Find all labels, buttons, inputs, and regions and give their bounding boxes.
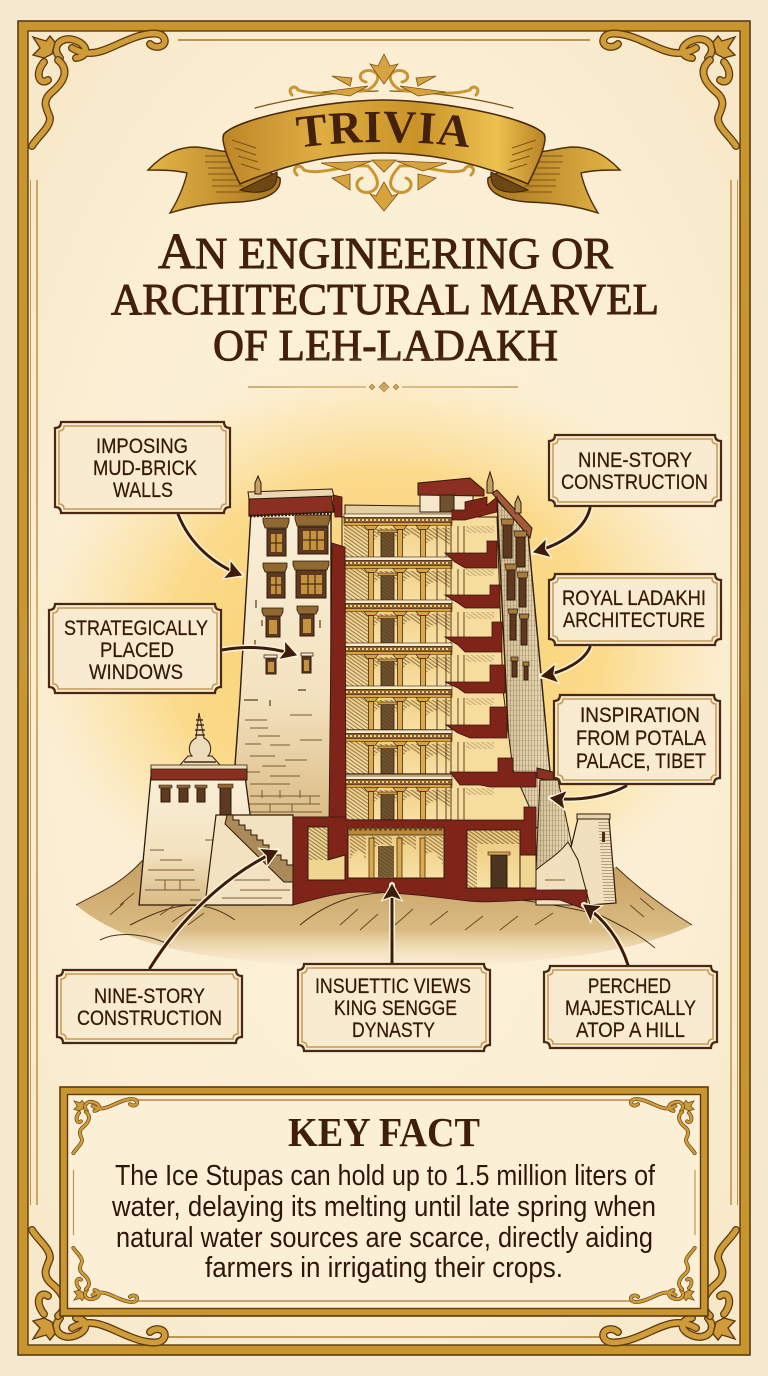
label: insuettic views king sengge dynasty: KING SENGGE: [334, 997, 457, 1020]
red cutaway structure: [293, 495, 587, 910]
label: imposing mud-brick walls: [55, 422, 230, 513]
label: royal ladakhi architecture: [549, 574, 721, 645]
key fact body text: water, delaying its melting until late spring when: [111, 1191, 656, 1223]
label: royal ladakhi architecture: ROYAL LADAKHI: [562, 587, 706, 610]
key fact heading: KEY FACT: [288, 1109, 480, 1155]
arrow: bottom nine-story: [150, 851, 277, 968]
label: inspiration from potala palace: INSPIRATION: [580, 704, 700, 727]
banner title: TRIVIA: [296, 112, 469, 148]
label: insuettic views king sengge dynasty: INSUETTIC VIEWS: [315, 975, 471, 998]
label: inspiration from potala palace: FROM POTALA: [576, 727, 706, 750]
small stupa building: [139, 713, 262, 905]
key fact body text: natural water sources are scarce, directly aiding: [116, 1222, 653, 1254]
floor 5: [344, 686, 494, 730]
right tower windows: [501, 519, 529, 680]
stairway wall: [205, 815, 293, 905]
title line 1: AN ENGINEERING OR: [158, 224, 614, 280]
golden glow behind palace: [19, 350, 749, 950]
arrow: perched on hill: [584, 905, 628, 965]
label: perched atop a hill: [544, 966, 717, 1048]
upper penthouse: [345, 478, 484, 518]
ribbon main band: [223, 100, 545, 184]
label: royal ladakhi architecture: ARCHITECTURE: [563, 609, 705, 632]
floor 3: [344, 776, 494, 820]
label: nine-story construction top: [549, 435, 721, 506]
key fact corner flourish: top left: [73, 1099, 137, 1153]
floor 9: [344, 514, 494, 558]
arrow: potala inspiration: [551, 786, 626, 799]
title line 3: OF LEH-LADAKH: [213, 321, 558, 370]
label: insuettic views king sengge dynasty: [298, 964, 490, 1051]
palace illustration: [76, 472, 692, 968]
key fact corner flourish: top right: [631, 1099, 695, 1153]
floor 8: [344, 557, 494, 601]
label: imposing mud-brick walls: IMPOSING: [96, 435, 188, 458]
key fact body text: [111, 1160, 656, 1284]
ornament above banner: [255, 54, 513, 108]
label: nine-story construction bottom: [57, 970, 242, 1043]
label: inspiration from potala palace: PALACE, TIBET: [576, 750, 706, 773]
title: [111, 224, 659, 370]
label: insuettic views king sengge dynasty: DYNASTY: [352, 1019, 435, 1042]
title line 2: ARCHITECTURAL MARVEL: [111, 275, 659, 324]
label: imposing mud-brick walls: WALLS: [113, 479, 173, 502]
floor 6: [344, 643, 494, 687]
arrow: imposing walls: [178, 514, 241, 575]
tower windows: [262, 515, 330, 674]
left tower roof: [249, 494, 334, 516]
arrow: top nine-story: [534, 508, 590, 552]
corner flourish: bottom right: [603, 1230, 736, 1342]
arrow: windows: [222, 648, 296, 655]
right tower: [487, 472, 575, 870]
corner flourish: top left: [32, 34, 165, 146]
floor 4: [344, 730, 494, 774]
title divider: [248, 382, 518, 392]
ribbon tail right: [488, 147, 620, 213]
label: strategically placed windows: STRATEGICALLY: [64, 617, 208, 640]
label: strategically placed windows: PLACED: [100, 639, 174, 662]
ribbon tail left: [148, 147, 280, 213]
panel: key fact: [60, 1087, 708, 1316]
cutaway interior: [342, 514, 536, 822]
left tower: [216, 476, 334, 822]
basement rooms: [308, 827, 536, 888]
label: perched atop a hill: PERCHED: [588, 975, 671, 998]
ornament below banner: [295, 160, 473, 211]
arrow: royal architecture: [542, 647, 590, 676]
label: perched atop a hill: MAJESTICALLY: [565, 997, 696, 1020]
label: imposing mud-brick walls: MUD-BRICK: [93, 457, 197, 480]
stupa: [180, 713, 220, 770]
label: nine-story construction top: CONSTRUCTION: [561, 471, 708, 494]
left tower finial: [255, 476, 261, 494]
key fact corner flourish: bottom left: [73, 1248, 137, 1302]
hill: [76, 860, 692, 968]
key fact corner flourish: bottom right: [631, 1248, 695, 1302]
label: perched atop a hill: ATOP A HILL: [576, 1019, 685, 1042]
label: strategically placed windows: [49, 604, 221, 693]
floor 7: [344, 600, 494, 644]
key fact body text: The Ice Stupas can hold up to 1.5 million liters of: [115, 1160, 656, 1192]
label: nine-story construction bottom: CONSTRUCTION: [77, 1007, 222, 1030]
arrow: insuettic views: [389, 885, 395, 964]
label: strategically placed windows: WINDOWS: [89, 661, 183, 684]
corner flourish: top right: [603, 34, 736, 146]
right small tower: [536, 814, 616, 905]
corner flourish: bottom left: [32, 1230, 165, 1342]
label: inspiration from potala palace: [554, 695, 720, 784]
key fact body text: farmers in irrigating their crops.: [205, 1252, 563, 1284]
label: nine-story construction bottom: NINE-STORY: [94, 985, 205, 1008]
label: nine-story construction top: NINE-STORY: [578, 449, 692, 472]
right tower finials: [487, 472, 521, 513]
banner ribbon: [146, 53, 622, 214]
